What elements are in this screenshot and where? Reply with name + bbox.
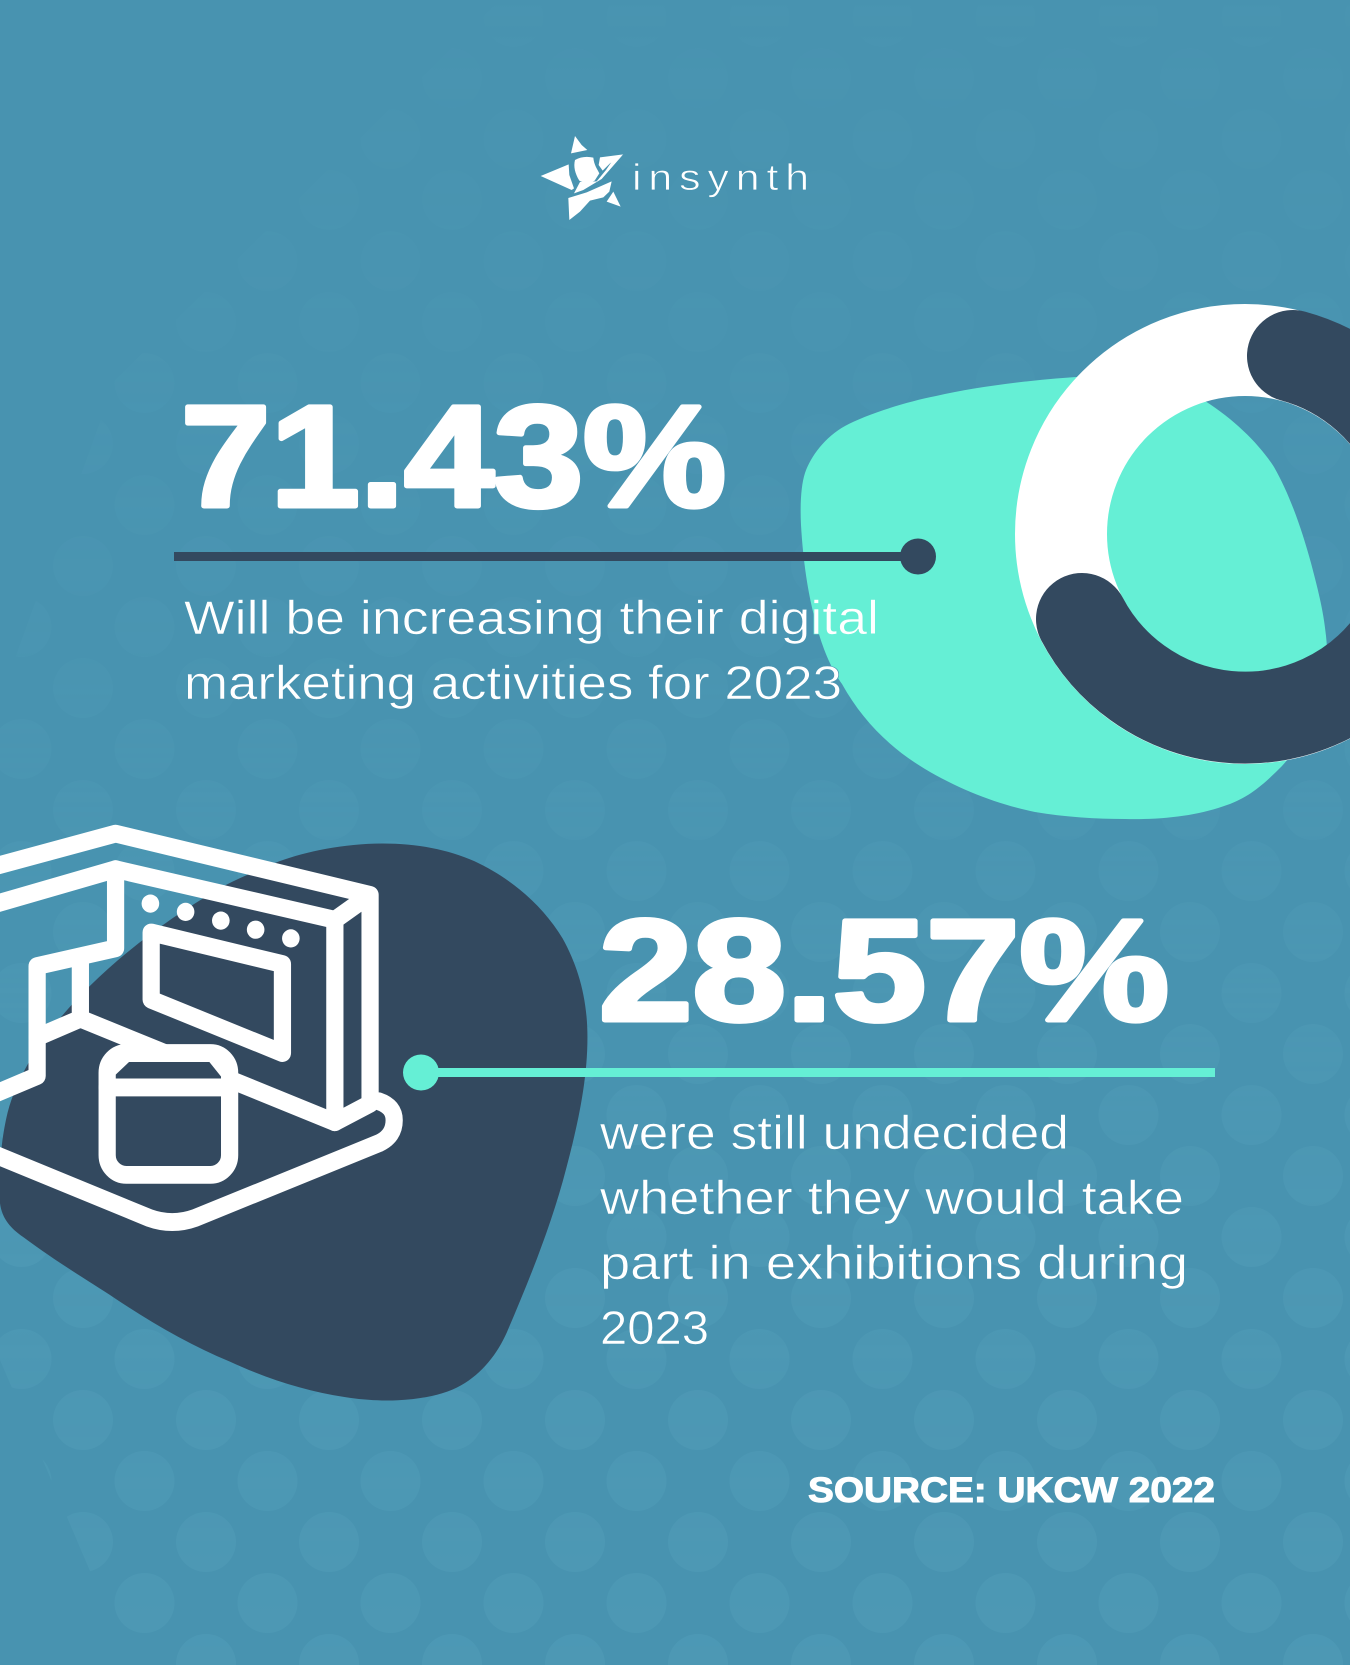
- description text: were still undecided: [599, 1106, 1069, 1159]
- description text: [599, 1106, 1188, 1354]
- big number 71.43%: 71.43%: [181, 376, 726, 537]
- navy blob: [0, 843, 587, 1401]
- donut chart: [1061, 350, 1350, 718]
- description text: part in exhibitions during: [600, 1236, 1188, 1289]
- logo: insynth: [541, 136, 816, 220]
- description text: whether they would take: [599, 1171, 1184, 1224]
- description text: Will be increasing their dig ital: [184, 591, 879, 644]
- icon: star logo: [541, 136, 623, 220]
- panel: digital marketing statistic: [174, 350, 1350, 819]
- logo wordmark: insynth: [632, 157, 816, 198]
- description text: marketing activities for 2023: [184, 656, 842, 709]
- source note: SOURCE: UKCW 2022: [808, 1471, 1215, 1510]
- booth lights: [142, 895, 300, 947]
- booth crate: [107, 1053, 230, 1175]
- panel: exhibitions statistic: [0, 834, 1215, 1401]
- description text: [184, 591, 879, 709]
- icon: exhibition booth: [0, 834, 394, 1222]
- big number 28.57%: 28.57%: [599, 890, 1169, 1051]
- connector line and dot: [403, 1054, 1215, 1090]
- description text: 2023: [600, 1301, 709, 1354]
- connector line and dot: [174, 538, 936, 574]
- teal blob: [801, 377, 1327, 819]
